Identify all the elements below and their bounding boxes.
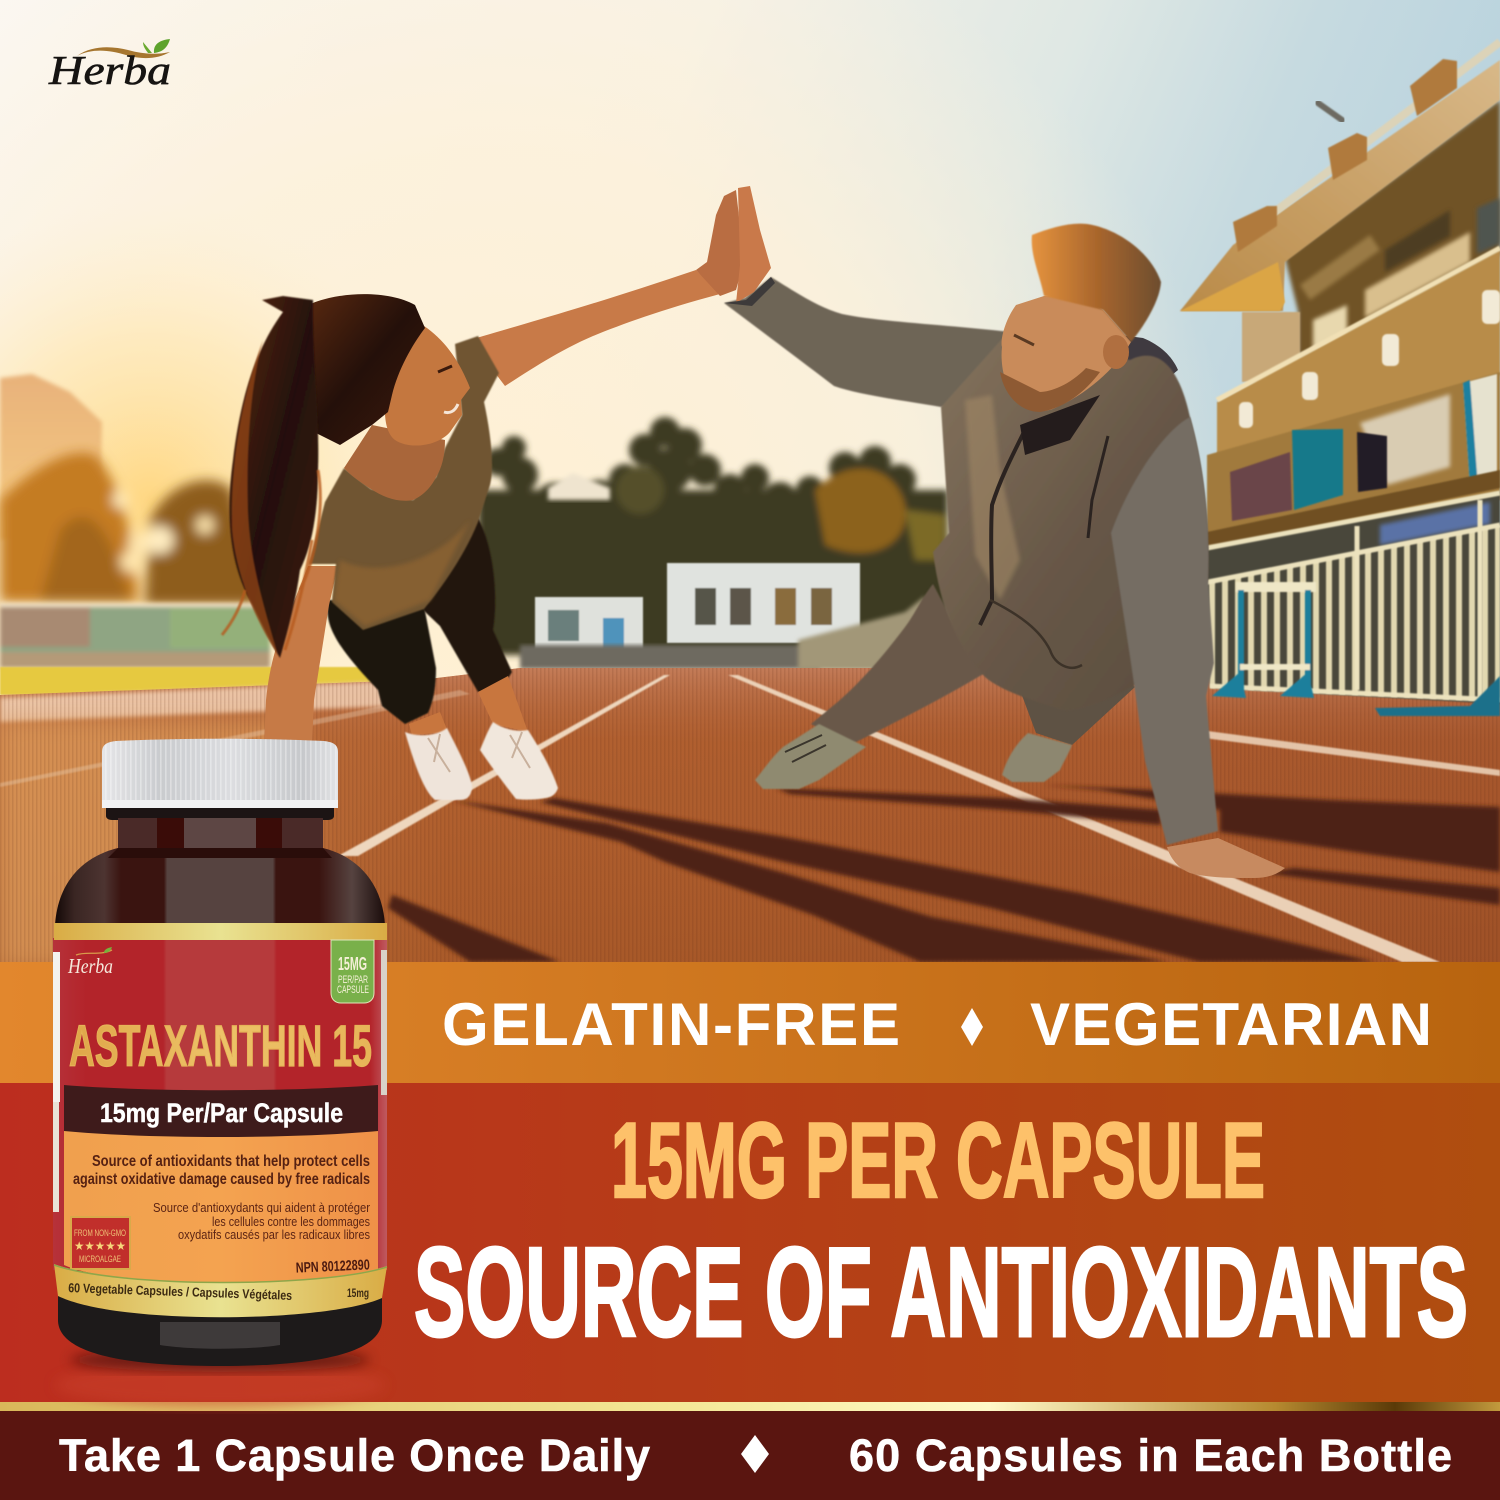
- take 1 capsule: Take 1 Capsule Once Daily: [59, 1430, 650, 1481]
- supporting arm: [1111, 417, 1218, 845]
- green hairline: [54, 1265, 387, 1283]
- lower storey: [1207, 372, 1500, 555]
- cap: [102, 739, 338, 808]
- teal door: [1292, 429, 1343, 510]
- front shoe: [755, 724, 866, 789]
- vegetarian: VEGETARIAN: [1030, 991, 1432, 1058]
- trees centre: [478, 417, 948, 655]
- purple panel: [1230, 452, 1292, 521]
- microalgae stamp: MICROALGAE: [79, 1254, 121, 1265]
- dark strength band: 15mg Per/Par Capsule: [100, 1098, 343, 1128]
- white building large: [667, 563, 860, 643]
- product bottle: [53, 739, 387, 1407]
- face: [1002, 296, 1131, 411]
- green badge: [331, 940, 374, 1003]
- dark strength band: [64, 1085, 378, 1137]
- left shoe: [405, 728, 472, 800]
- eye: [438, 366, 452, 372]
- roof fascia: [1180, 60, 1500, 311]
- cuff: [724, 277, 775, 306]
- smile: [444, 404, 458, 413]
- neck: [344, 425, 445, 501]
- long shadows: [388, 785, 1500, 962]
- grandstand building: [1180, 42, 1500, 555]
- logo on label: [67, 947, 113, 978]
- rear shoe: [1002, 733, 1072, 782]
- english claim: [73, 1153, 370, 1188]
- bottom bar: [0, 1411, 1500, 1500]
- roof railing: [1240, 42, 1500, 238]
- sky: [0, 0, 1500, 720]
- npn: NPN 80122890: [296, 1257, 370, 1277]
- neck ring: [106, 808, 334, 820]
- lamp: [1318, 103, 1342, 120]
- grass: [0, 667, 430, 695]
- right shoe: [480, 722, 558, 800]
- zip: [980, 432, 1024, 625]
- trees left: [0, 453, 262, 605]
- base highlight: [160, 1322, 280, 1349]
- gold divider: [0, 1402, 1500, 1411]
- white building small: [535, 597, 643, 649]
- sunlit hoodie patch: [965, 395, 1020, 600]
- shoulder glass: [55, 848, 385, 925]
- ponytail: [229, 296, 318, 658]
- torso: [933, 330, 1208, 710]
- man doing one-arm plank: [724, 186, 1285, 878]
- low fence behind track: [520, 645, 820, 669]
- raised arm: [724, 277, 1010, 407]
- 60 capsules: 60 Capsules in Each Bottle: [849, 1430, 1452, 1481]
- advertising boards and wall: [0, 603, 270, 668]
- green badge: CAPSULE: [337, 984, 369, 996]
- gold top band: [54, 923, 387, 940]
- beard: [1000, 368, 1100, 412]
- hood opening and tee: [1020, 395, 1100, 455]
- microalgae stamp: ★★★★★: [74, 1239, 126, 1253]
- facade plaques: [1239, 290, 1500, 428]
- blue hurdle foot: [1375, 676, 1500, 716]
- blue seats: [1380, 502, 1490, 545]
- trackside fence: [1203, 492, 1500, 716]
- diamond: [741, 1435, 769, 1473]
- strength small: 15mg: [347, 1286, 369, 1300]
- orange panel: [64, 1130, 378, 1284]
- hood back: [1120, 335, 1178, 385]
- dark door: [1357, 432, 1387, 492]
- face: [385, 326, 470, 446]
- hair: [1032, 224, 1161, 342]
- ponytail strands: [222, 470, 320, 650]
- french claim: oxydatifs causés par les radicaux libres: [178, 1228, 370, 1242]
- shirt sunlit fold: [334, 520, 470, 626]
- tower wall: [1242, 312, 1300, 382]
- bottle base: [58, 1290, 382, 1366]
- diamond: [961, 1008, 983, 1046]
- rear leg: [328, 600, 436, 724]
- red label: [53, 938, 387, 1270]
- awning: [1180, 262, 1285, 311]
- product name: ASTAXANTHIN 15: [69, 1014, 372, 1079]
- chimneys: [1233, 59, 1457, 252]
- eye: [1014, 335, 1034, 345]
- front leg: [422, 518, 512, 692]
- gelatin-free: GELATIN-FREE: [442, 991, 900, 1058]
- upper windows: [1300, 198, 1500, 350]
- orange banner: [0, 962, 1500, 1083]
- shirt: [309, 336, 499, 630]
- pale window: [1360, 394, 1450, 485]
- woman doing one-arm plank: [222, 190, 744, 800]
- front leg: [811, 584, 985, 745]
- label right strip: [381, 950, 387, 1095]
- ledge: [1207, 470, 1500, 548]
- label left strip: [53, 952, 60, 1212]
- rear thigh: [1020, 650, 1135, 745]
- palm of woman: [696, 190, 744, 296]
- french claim: [153, 1201, 370, 1242]
- head hair: [300, 294, 425, 445]
- bottle shadow: [70, 1348, 370, 1372]
- english claim: Source of antioxidants that help protect cells: [92, 1153, 370, 1170]
- upper storey: [1285, 100, 1500, 358]
- green badge: 15MG: [338, 954, 367, 974]
- english claim: against oxidative damage caused by free radicals: [73, 1171, 370, 1188]
- bottle reflection: [55, 1363, 385, 1407]
- distant tower block: [0, 374, 102, 540]
- supporting arm: [264, 566, 338, 745]
- running track: [0, 668, 1500, 965]
- facade band: [1217, 250, 1500, 520]
- slats: [1203, 525, 1500, 702]
- teal and white panel: [1463, 374, 1497, 487]
- microalgae stamp: FROM NON-GMO: [74, 1228, 126, 1239]
- ponytail rim light: [232, 340, 278, 655]
- far house among trees: [548, 473, 610, 500]
- french claim: Source d'antioxydants qui aident à protéger: [153, 1201, 370, 1215]
- green badge: PER/PAR: [338, 974, 368, 986]
- calves: [409, 676, 528, 735]
- lane lines: [0, 675, 1500, 962]
- raised arm: [470, 270, 720, 386]
- pocket: [990, 600, 1082, 668]
- french claim: les cellules contre les dommages: [212, 1215, 370, 1229]
- ear: [1103, 335, 1129, 369]
- drawstring: [1088, 436, 1108, 538]
- supporting hand: [1167, 838, 1285, 878]
- logo on label: Herba: [67, 954, 113, 978]
- logo: Herba: Herba: [48, 47, 171, 93]
- palm of man: [736, 186, 771, 303]
- count: 60 Vegetable Capsules / Capsules Végétales: [68, 1280, 292, 1303]
- red banner: [0, 1083, 1500, 1403]
- blue hurdle: [1212, 582, 1316, 698]
- side stand: [798, 596, 925, 670]
- neck: [118, 818, 323, 850]
- gold bottom band: [54, 1264, 387, 1317]
- microalgae stamp: [71, 1217, 130, 1269]
